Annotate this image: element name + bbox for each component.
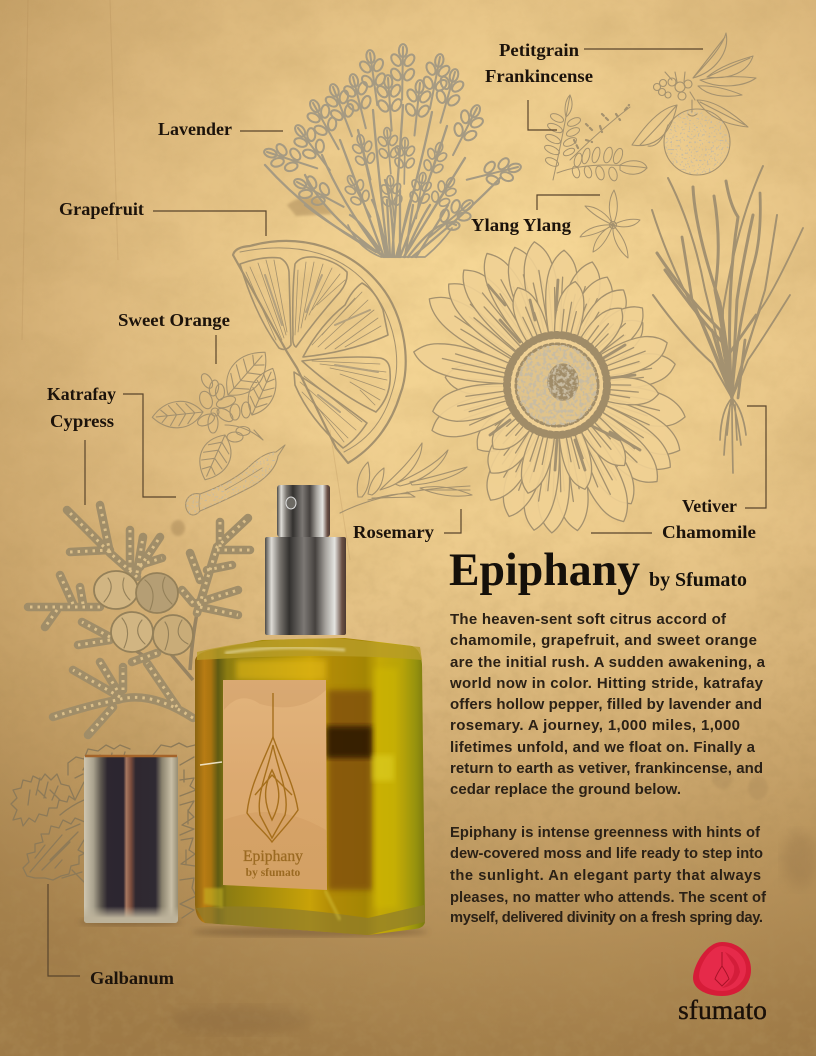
ingredient labels: Frankincense	[485, 66, 593, 86]
logo: red wax seal with sfumato wordmark: sfumato	[678, 995, 767, 1025]
description paragraph 1: The heaven-sent soft citrus accord of	[450, 611, 727, 628]
ingredient labels	[47, 40, 756, 988]
illustration: vetiver	[652, 166, 803, 473]
description paragraph 2	[450, 825, 766, 926]
bottle label: Epiphany	[243, 848, 303, 865]
ingredient labels: Cypress	[50, 411, 114, 431]
ingredient labels: Petitgrain	[499, 40, 579, 60]
ingredient labels: Chamomile	[662, 522, 756, 542]
title	[449, 544, 747, 596]
ingredient labels: Galbanum	[90, 968, 174, 988]
description paragraph 2: pleases, no matter who attends. The scent of	[450, 890, 766, 906]
silver sprayer collar	[265, 537, 346, 635]
description paragraph 1: are the initial rush. A sudden awakening, a	[450, 654, 766, 671]
ingredient labels: Katrafay	[47, 384, 116, 404]
description paragraph 2: Epiphany is intense greenness with hints of	[450, 825, 760, 841]
illustration: grapefruit slice	[233, 241, 406, 463]
ingredient labels: Lavender	[158, 119, 232, 139]
loose silver cap	[78, 755, 182, 926]
description paragraph 2: the sunlight. An elegant party that always	[450, 868, 761, 884]
roots	[720, 398, 746, 473]
description paragraph 1: chamomile, grapefruit, and sweet orange	[450, 632, 757, 649]
description paragraph 1: world now in color. Hitting stride, katrafay	[449, 675, 764, 692]
description paragraph 1: lifetimes unfold, and we float on. Finally a	[450, 739, 756, 756]
bottle label: by sfumato	[246, 867, 301, 879]
illustration: chamomile	[410, 239, 689, 533]
ingredient labels: Ylang Ylang	[471, 215, 571, 235]
wax seal	[693, 942, 751, 996]
ingredient labels: Grapefruit	[59, 199, 144, 219]
illustration: rosemary	[340, 443, 472, 513]
illustration: galbanum	[11, 743, 196, 918]
illustration: sweet orange blossom	[151, 342, 284, 486]
illustration: lavender	[260, 44, 524, 257]
bottle label	[223, 680, 327, 890]
illustration: frankincense sprig	[543, 95, 647, 182]
logo: red wax seal with sfumato wordmark	[678, 942, 767, 1025]
illustration: ylang ylang	[580, 190, 640, 258]
title: by Sfumato	[649, 570, 747, 591]
illustration: petitgrain orange	[632, 33, 756, 175]
description paragraph 1: rosemary. A journey, 1,000 miles, 1,000	[450, 717, 740, 734]
description paragraph 1: offers hollow pepper, filled by lavender and	[450, 696, 762, 713]
description paragraph 1	[449, 611, 766, 798]
silver sprayer top	[277, 485, 330, 537]
description paragraph 2: myself, delivered divinity on a fresh spring day.	[450, 910, 763, 926]
title: Epiphany	[449, 544, 640, 596]
ingredient labels: Rosemary	[353, 522, 434, 542]
ingredient labels: Vetiver	[682, 496, 737, 516]
leader lines	[48, 49, 766, 976]
ingredient labels: Sweet Orange	[118, 310, 230, 330]
bottle glass body	[195, 638, 425, 935]
flower centre	[488, 280, 640, 470]
illustration: katrafay pod	[186, 445, 285, 515]
description paragraph 1: cedar replace the ground below.	[450, 781, 681, 798]
description paragraph 2: dew-covered moss and life ready to step into	[450, 846, 763, 862]
description paragraph 1: return to earth as vetiver, frankincense, and	[450, 760, 763, 777]
perfume bottle	[192, 485, 428, 937]
illustration: katrafay cypress	[28, 505, 250, 735]
